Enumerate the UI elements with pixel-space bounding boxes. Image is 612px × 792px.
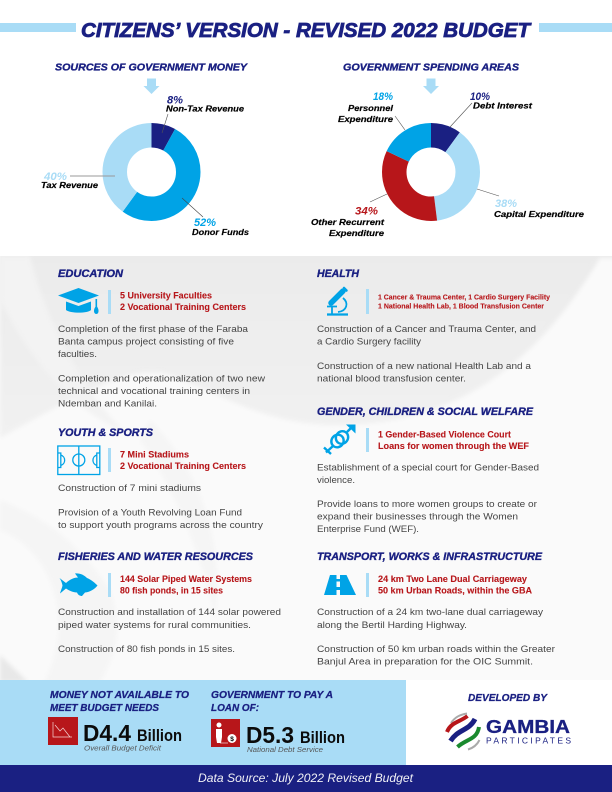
text: fisheries: [58, 607, 281, 655]
heading: health: HEALTH: [317, 268, 359, 280]
heading: spending: GOVERNMENT SPENDING AREAS: [343, 62, 519, 74]
panel: education: [58, 268, 265, 410]
icon: gender symbols: [324, 424, 356, 454]
icon: fish: [60, 573, 98, 596]
label: donor funds: 52%: [194, 217, 216, 229]
panel: budget callouts: [0, 680, 406, 765]
label: debt interest: Debt Interest: [473, 100, 533, 110]
text: gender: Enterprise Fund (WEF).: [317, 524, 419, 535]
icon: down arrow: [423, 78, 439, 94]
label: personnel expenditure: [338, 91, 405, 130]
label: other recurrent expenditure: 34%: [355, 206, 378, 218]
text: fisheries: Construction of 80 fish ponds in 15 sites.: [58, 644, 235, 655]
text: gender: [317, 462, 539, 535]
text: gender: violence.: [317, 475, 355, 486]
key figures: youth: [108, 448, 246, 472]
text: gender: expand their businesses through the Women: [317, 512, 518, 522]
text: fisheries: piped water systems for rural communities.: [58, 620, 251, 631]
title banner: CITIZENS’ VERSION - REVISED 2022 BUDGET: [81, 20, 532, 42]
label: other recurrent expenditure: Expenditure: [329, 228, 384, 238]
text: transport: along the Bertil Harding Highway.: [317, 620, 467, 631]
label: donor funds: Donor Funds: [192, 227, 249, 237]
key figures: health: 1 National Health Lab, 1 Blood Transfusion Center: [378, 302, 544, 310]
donut chart: spending: [394, 135, 468, 209]
panel: developed by: DEVELOPED BY: [468, 693, 549, 704]
text: education: technical and vocational training centers in: [58, 386, 250, 397]
text: health: national blood transfusion center.: [317, 374, 466, 384]
panel: gender, children and social welfare: [317, 406, 539, 535]
footer: data source: [0, 765, 612, 792]
heading: fisheries: FISHERIES AND WATER RESOURCES: [58, 551, 253, 563]
callout: budget deficit: [48, 690, 189, 752]
text: education: Completion of the first phase of the Faraba: [58, 324, 249, 335]
heading: education: EDUCATION: [58, 268, 123, 280]
callout: budget deficit: D4.4: [83, 720, 131, 746]
callout: debt service: National Debt Service: [247, 745, 323, 754]
heading: transport: TRANSPORT, WORKS & INFRASTRUCTURE: [317, 551, 543, 563]
callout: debt service: GOVERNMENT TO PAY A: [211, 690, 333, 701]
key figures: gender: 1 Gender-Based Violence Court: [378, 430, 511, 440]
callout: budget deficit: MEET BUDGET NEEDS: [50, 703, 159, 714]
footer: data source: Data Source: July 2022 Revised Budget: [198, 771, 414, 785]
label: capital expenditure: Capital Expenditure: [494, 209, 584, 219]
callout: debt service: Billion: [300, 729, 345, 747]
text: fisheries: Construction and installation of 144 solar powered: [58, 607, 281, 618]
text: health: Construction of a Cancer and Trauma Center, and: [317, 324, 536, 335]
logo wordmark: PARTICIPATES: [486, 736, 571, 746]
icon: microscope: [327, 288, 348, 314]
panel: government spending areas: [311, 62, 584, 238]
text: youth: Construction of 7 mini stadiums: [58, 483, 201, 494]
icon: down arrow: [144, 78, 160, 94]
icon: falling chart: [48, 717, 78, 745]
icon: football pitch: [58, 446, 100, 474]
text: health: Construction of a new national Health Lab and a: [317, 361, 532, 372]
key figures: education: 5 University Faculties: [120, 290, 212, 300]
label: other recurrent expenditure: [311, 194, 387, 238]
callout: debt service: D5.3: [246, 722, 294, 748]
panel: developed by: [447, 693, 571, 750]
label: non-tax revenue: 8%: [167, 94, 183, 106]
panel: fisheries and water resources: [58, 551, 281, 655]
panel: health: [317, 268, 550, 384]
label: debt interest: 10%: [470, 91, 490, 103]
label: non-tax revenue: [162, 94, 244, 133]
heading: gender: GENDER, CHILDREN & SOCIAL WELFARE: [317, 406, 534, 418]
key figures: gender: [366, 428, 529, 452]
label: other recurrent expenditure: Other Recurrent: [311, 217, 385, 227]
key figures: fisheries: 144 Solar Piped Water Systems: [120, 574, 252, 584]
text: education: Completion and operationalization of two new: [58, 374, 265, 384]
text: gender: Provide loans to more women groups to create or: [317, 499, 538, 510]
label: capital expenditure: [477, 189, 584, 219]
key figures: gender: Loans for women through the WEF: [378, 441, 529, 451]
label: personnel expenditure: Expenditure: [338, 114, 393, 124]
label: donor funds: [182, 198, 249, 237]
panel: youth and sports: [58, 427, 263, 531]
heading: sources: SOURCES OF GOVERNMENT MONEY: [55, 62, 248, 74]
key figures: fisheries: [108, 573, 252, 597]
key figures: education: [108, 290, 246, 314]
label: personnel expenditure: Personnel: [348, 103, 394, 113]
text: transport: Construction of 50 km urban roads within the Greater: [317, 644, 556, 655]
icon: road: [324, 575, 356, 595]
callout: budget deficit: Billion: [137, 727, 182, 745]
heading: youth: YOUTH & SPORTS: [58, 427, 153, 439]
label: capital expenditure: 38%: [495, 198, 517, 210]
key figures: youth: 7 Mini Stadiums: [120, 450, 189, 460]
panel: transport, works and infrastructure: [317, 551, 556, 668]
text: education: Banta campus project consisting of five: [58, 336, 234, 348]
key figures: education: 2 Vocational Training Centers: [120, 302, 246, 312]
text: transport: Construction of a 24 km two-lane dual carriageway: [317, 607, 543, 618]
background swoosh panel: [0, 250, 612, 690]
label: tax revenue: [41, 171, 115, 190]
label: non-tax revenue: Non-Tax Revenue: [166, 104, 244, 114]
callout: budget deficit: Overall Budget Deficit: [84, 744, 162, 752]
text: education: faculties.: [58, 349, 97, 360]
text: transport: [317, 607, 556, 668]
text: health: [317, 324, 536, 384]
key figures: transport: 24 km Two Lane Dual Carriageway: [378, 574, 527, 584]
key figures: youth: 2 Vocational Training Centers: [120, 461, 246, 471]
label: debt interest: [450, 91, 533, 127]
panel: sources of government money: [41, 62, 249, 237]
callout: budget deficit: MONEY NOT AVAILABLE TO: [50, 690, 189, 701]
logo wordmark: [486, 716, 571, 746]
label: tax revenue: Tax Revenue: [41, 180, 98, 190]
text: education: Ndemban and Kanilai.: [58, 398, 157, 410]
callout: debt service: LOAN OF:: [211, 703, 259, 714]
text: gender: Establishment of a special court for Gender-Based: [317, 462, 539, 474]
text: youth: to support youth programs across the country: [58, 520, 263, 531]
label: personnel expenditure: 18%: [373, 91, 393, 103]
key figures: health: 1 Cancer & Trauma Center, 1 Cardio Surgery Facility: [378, 292, 550, 302]
text: youth: Provision of a Youth Revolving Loan Fund: [58, 508, 242, 518]
key figures: transport: [366, 573, 532, 597]
logo: gambia participates globe: [447, 714, 480, 750]
icon: person with debt ball: $: [230, 736, 234, 743]
icon: graduation cap: [58, 288, 99, 314]
label: tax revenue: 40%: [43, 171, 67, 183]
key figures: transport: 50 km Urban Roads, within the GBA: [378, 586, 532, 596]
text: education: [58, 324, 265, 410]
key figures: health: [366, 289, 550, 314]
text: transport: Banjul Area in preparation for the OIC Summit.: [317, 656, 533, 668]
logo wordmark: GAMBIA: [486, 716, 570, 737]
donut chart: sources: [115, 135, 188, 209]
key figures: fisheries: 80 fish ponds, in 15 sites: [120, 586, 223, 596]
text: youth: [58, 483, 263, 531]
text: health: a Cardio Surgery facility: [317, 336, 421, 348]
callout: debt service: [211, 690, 345, 754]
